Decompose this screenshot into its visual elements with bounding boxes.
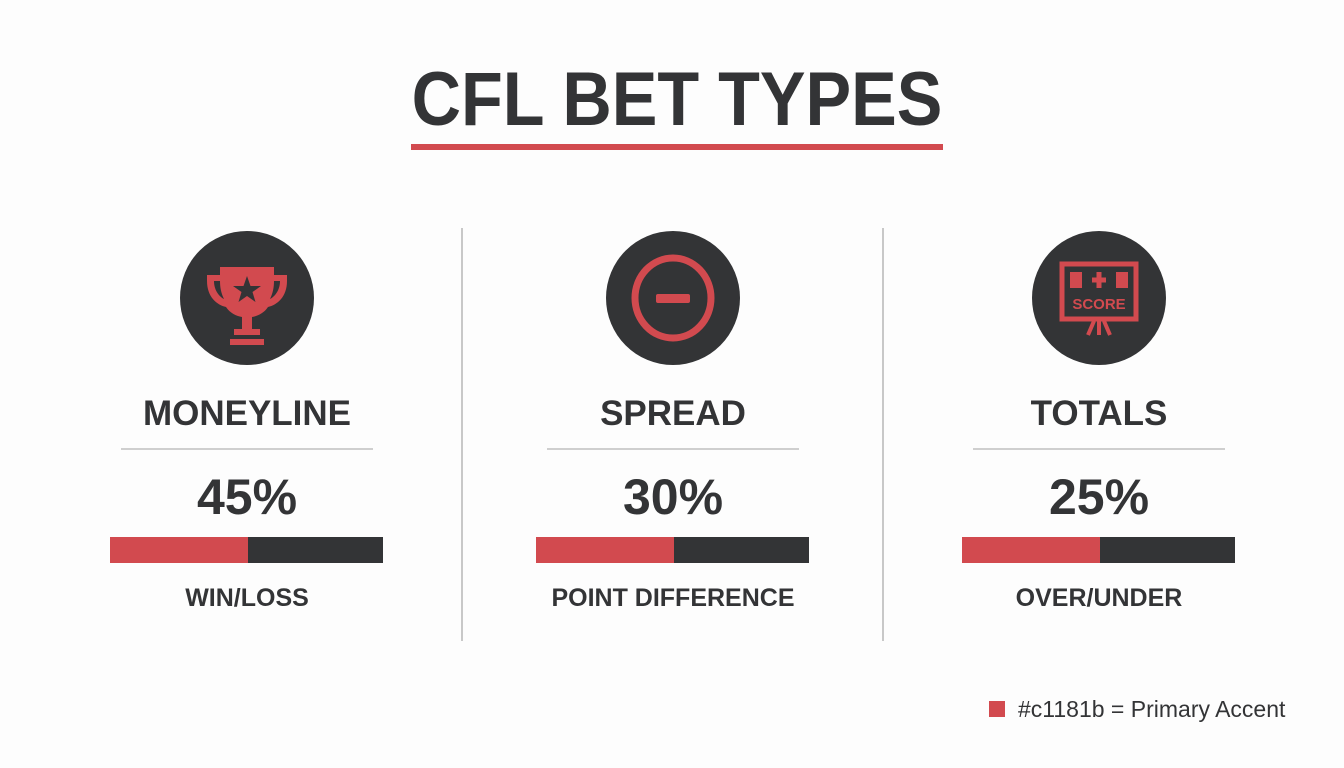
label: POINT DIFFERENCE (551, 584, 795, 612)
title: CFL BET TYPES (412, 57, 942, 142)
percentage: 30% (623, 469, 723, 525)
heading: SPREAD (600, 394, 746, 433)
icon: scoreboard: SCORE (1072, 296, 1126, 313)
label: WIN/LOSS (185, 584, 309, 612)
icon: trophy (180, 231, 314, 365)
panel: spread (536, 231, 809, 612)
icon: minus circle (606, 231, 740, 365)
title underline (411, 144, 943, 150)
legend: #c1181b = Primary Accent (1018, 696, 1285, 722)
label: OVER/UNDER (1016, 584, 1182, 612)
panel: moneyline (110, 231, 383, 612)
icon: scoreboard (1032, 231, 1166, 365)
panel: totals (962, 231, 1235, 612)
percentage: 45% (197, 469, 297, 525)
heading: MONEYLINE (143, 394, 351, 433)
heading: TOTALS (1031, 394, 1167, 433)
bar (962, 537, 1235, 563)
bar (110, 537, 383, 563)
bar (536, 537, 809, 563)
percentage: 25% (1049, 469, 1149, 525)
